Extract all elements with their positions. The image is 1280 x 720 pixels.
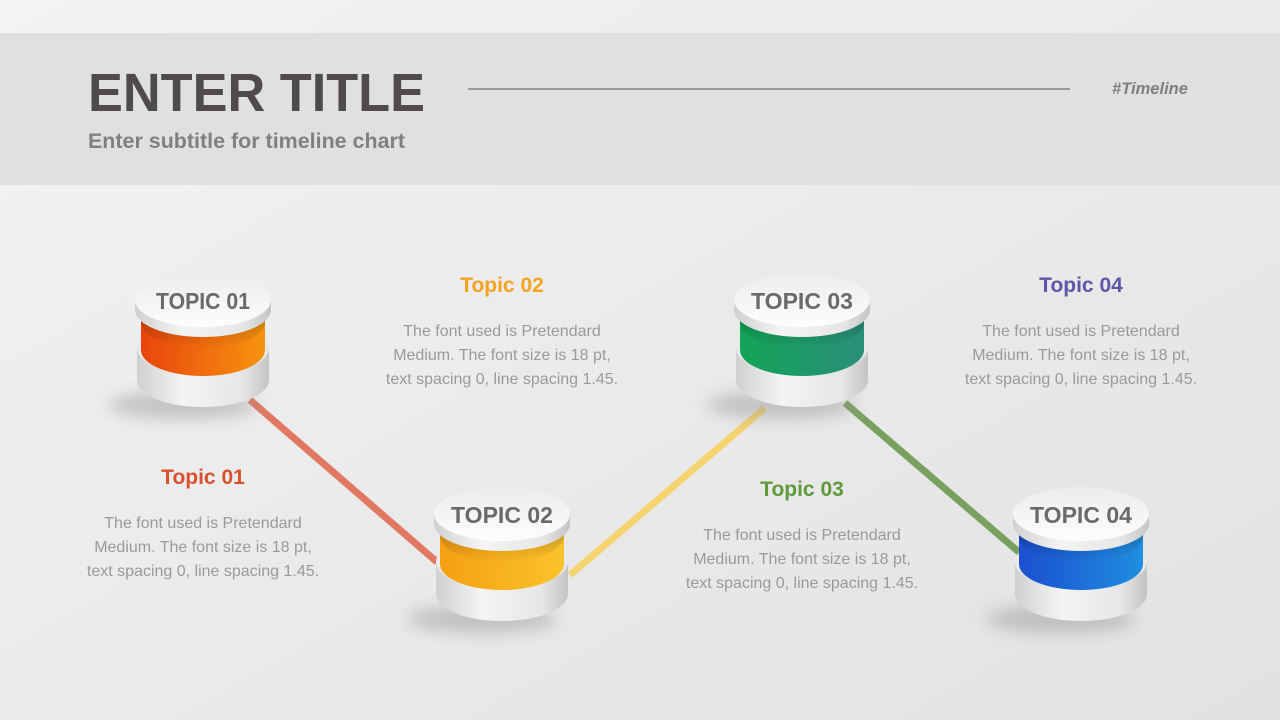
connector lines [250,400,1020,575]
cylinder: topic 04: TOPIC 04 [1030,502,1132,528]
text block: topic 01: The font used is Pretendard [104,515,302,532]
text block: topic 03: Medium. The font size is 18 pt, [693,551,911,568]
cylinder: topic 02 [407,487,570,633]
text block: topic 04: Topic 04 [1039,274,1123,297]
title: ENTER TITLE [88,63,425,123]
text block: topic 02: Medium. The font size is 18 pt, [393,347,611,364]
text block: topic 03: Topic 03 [760,478,844,501]
hashtag: #Timeline [1112,79,1188,98]
cylinder: topic 02: TOPIC 02 [451,502,553,528]
text block: topic 01: Topic 01 [161,466,245,489]
text block: topic 03 [686,478,918,592]
text block: topic 04 [965,274,1197,388]
header band [0,33,1280,185]
text block: topic 01: Medium. The font size is 18 pt, [94,539,312,556]
text block: topic 02: Topic 02 [460,274,544,297]
cylinder: topic 01 [108,273,271,419]
cylinder: topic 01: TOPIC 01 [156,288,250,314]
cylinder: topic 03 [707,273,870,419]
subtitle: Enter subtitle for timeline chart [88,130,405,153]
text block: topic 04: The font used is Pretendard [982,323,1180,340]
header rule [468,88,1070,90]
text block: topic 04: Medium. The font size is 18 pt, [972,347,1190,364]
text block: topic 04: text spacing 0, line spacing 1.45. [965,371,1197,388]
cylinder: topic 03: TOPIC 03 [751,288,853,314]
text block: topic 02: The font used is Pretendard [403,323,601,340]
text block: topic 01 [87,466,319,580]
text block: topic 03: text spacing 0, line spacing 1.45. [686,575,918,592]
text block: topic 02 [386,274,618,388]
text block: topic 02: text spacing 0, line spacing 1.45. [386,371,618,388]
text block: topic 03: The font used is Pretendard [703,527,901,544]
cylinder: topic 04 [986,487,1149,633]
text block: topic 01: text spacing 0, line spacing 1.45. [87,563,319,580]
